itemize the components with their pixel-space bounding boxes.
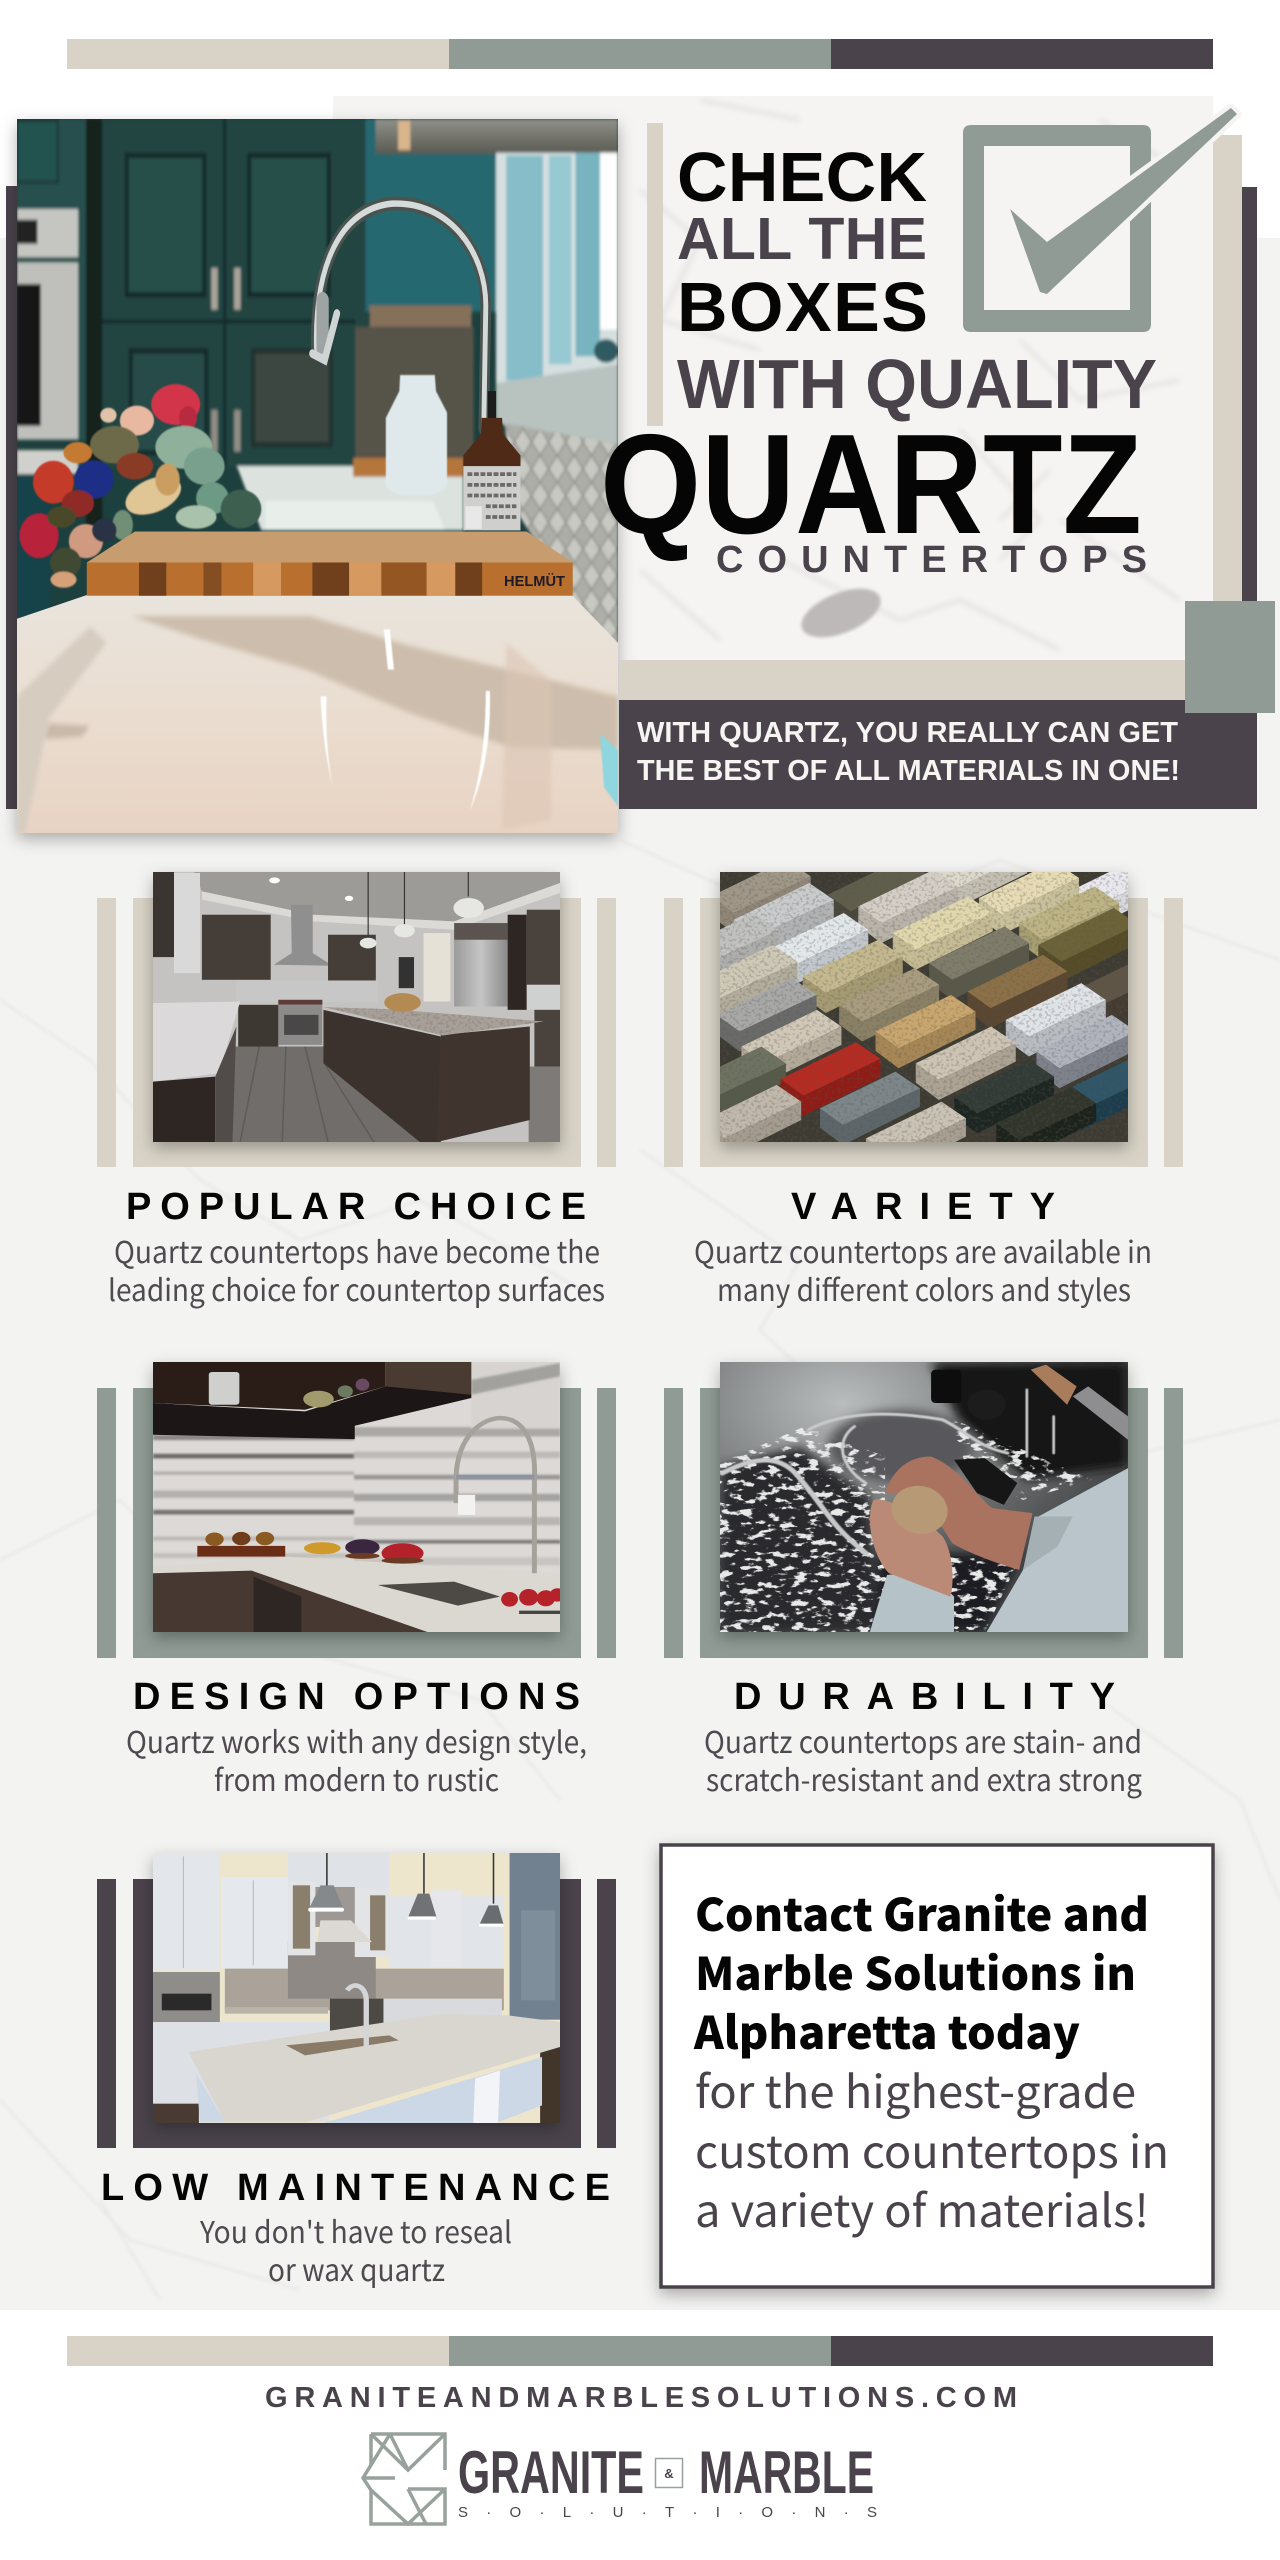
sage corner square (1185, 601, 1275, 713)
dark subtitle banner: WITH QUARTZ, YOU REALLY CAN GET (637, 717, 1178, 749)
description: scratch-resistant and extra strong (706, 1756, 1142, 1800)
icon: check mark (1010, 108, 1237, 294)
callout: contact box: Marble Solutions in (695, 1938, 1136, 2003)
callout: contact box: Alpharetta today (693, 1997, 1080, 2062)
description: or wax quartz (268, 2246, 445, 2290)
photo: hands kneading dough (720, 1362, 1128, 1632)
dark subtitle banner: THE BEST OF ALL MATERIALS IN ONE! (637, 755, 1180, 787)
callout: contact box: a variety of materials! (695, 2175, 1149, 2240)
description: from modern to rustic (214, 1756, 499, 1800)
flowers (19, 384, 261, 588)
description: leading choice for countertop surfaces (108, 1266, 605, 1310)
description (704, 1718, 1142, 1800)
logo: & (664, 2466, 674, 2481)
cutting board (87, 531, 573, 596)
logo (363, 2434, 877, 2524)
photo: white kitchen (153, 1853, 560, 2123)
logo: MARBLE (699, 2439, 874, 2506)
photo: striped wall kitchen (153, 1362, 565, 1632)
bottom colour band (67, 2336, 1213, 2366)
website url: GRANITEANDMARBLESOLUTIONS.COM (265, 2382, 1017, 2414)
description (108, 1228, 605, 1310)
callout: contact box: custom countertops in (695, 2116, 1169, 2181)
logo: S·O·L·U·T·I·O·N·S (458, 2504, 877, 2521)
title: COUNTERTOPS (716, 539, 1147, 581)
jug (386, 375, 447, 496)
top colour band (67, 39, 1213, 69)
heading: DURABILITY (734, 1676, 1115, 1718)
heading: VARIETY (791, 1186, 1055, 1228)
title: BOXES (677, 268, 928, 346)
photo: quartz samples (678, 838, 1173, 1175)
description (126, 1718, 587, 1800)
checkbox icon (963, 108, 1237, 332)
panel: durability (664, 1362, 1183, 1800)
decorative strips behind hero (6, 135, 1257, 809)
title: ALL THE (677, 206, 927, 272)
heading: LOW MAINTENANCE (101, 2167, 610, 2209)
beige banner band and sage square (619, 660, 1185, 700)
panel: low maintenance (97, 1853, 616, 2290)
title: WITH QUALITY (677, 345, 1157, 423)
description (694, 1228, 1152, 1310)
callout: contact box: Contact Granite and (695, 1879, 1149, 1944)
title: CHECK (677, 138, 927, 216)
panel: marble title background (333, 96, 1213, 660)
description: Quartz works with any design style, (126, 1718, 587, 1762)
cutting board brand text: HELMÜT (504, 573, 565, 590)
countertop (17, 595, 618, 833)
description: Quartz countertops are available in (694, 1228, 1152, 1272)
icon: geometric G mark (363, 2434, 445, 2524)
description: many different colors and styles (717, 1266, 1131, 1310)
beige vertical title bar (647, 123, 663, 426)
description: Quartz countertops are stain- and (704, 1718, 1142, 1762)
hero kitchen photo (17, 119, 618, 833)
heading: POPULAR CHOICE (126, 1186, 586, 1228)
wordmark: GRANITE (458, 2439, 644, 2506)
panel: variety (664, 838, 1183, 1310)
callout: contact box: for the highest-grade (695, 2056, 1136, 2121)
description: You don't have to reseal (199, 2208, 512, 2252)
faucet (312, 204, 486, 429)
panel: popular choice (97, 872, 616, 1310)
dark subtitle banner (619, 700, 1257, 809)
photo: dark kitchen (153, 872, 560, 1142)
description: Quartz countertops have become the (114, 1228, 600, 1272)
heading: DESIGN OPTIONS (133, 1676, 580, 1718)
callout: contact box (661, 1845, 1213, 2287)
title (600, 138, 1157, 581)
panel: design options (97, 1362, 616, 1800)
description (199, 2208, 512, 2290)
soap bottle (463, 391, 520, 530)
title: QUARTZ (600, 405, 1142, 564)
